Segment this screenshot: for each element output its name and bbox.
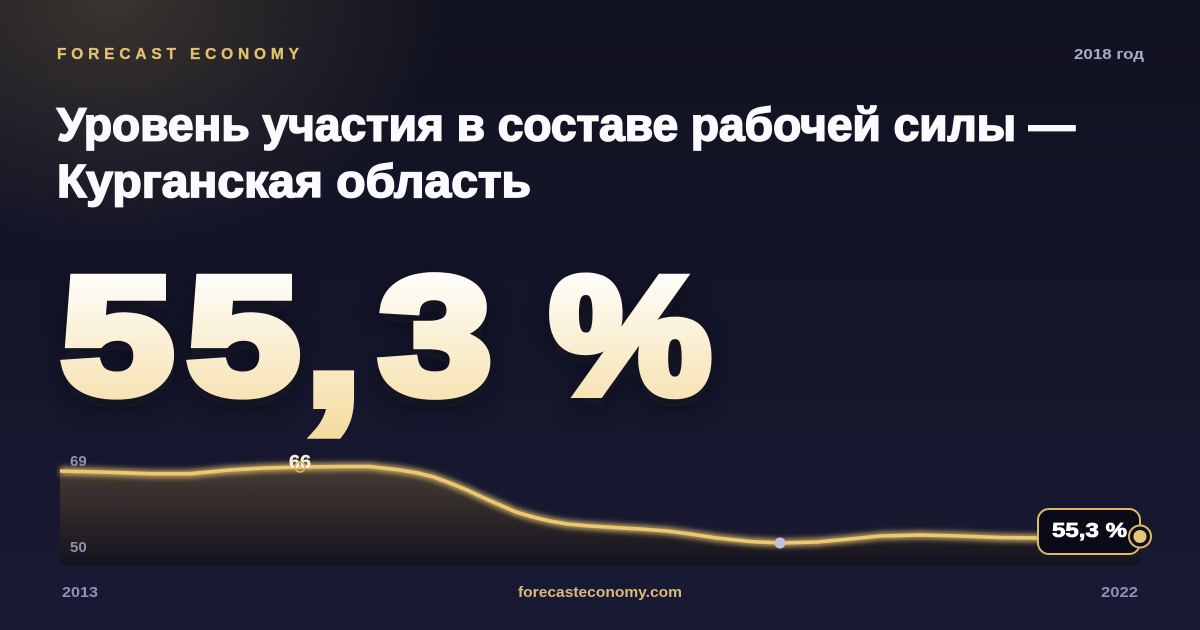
- brand label: FORECAST ECONOMY: [57, 46, 300, 63]
- minimum marker: [774, 538, 786, 548]
- big value: 55,3 %: 3: [379, 243, 492, 429]
- big value shadow: 3: [379, 251, 492, 437]
- chart: line: [60, 466, 1141, 543]
- title: [57, 98, 1075, 207]
- value badge: 55,3 %: [1052, 520, 1127, 542]
- big value shadow: 5: [61, 251, 174, 437]
- start year: 2013: [62, 584, 98, 601]
- big value shadow: %: [550, 251, 711, 436]
- peak label: 66: 66: [289, 452, 311, 472]
- big value: 55,3 %: ,: [304, 230, 363, 445]
- value badge: [1038, 509, 1140, 554]
- axis label: 69: 69: [70, 453, 87, 470]
- big value: 55,3 %: 5: [187, 243, 300, 429]
- axis label: 50: 50: [70, 539, 87, 556]
- year label: 2018 год: [1074, 46, 1145, 63]
- big value shadow: [61, 251, 711, 437]
- chart: line glow: [60, 466, 1141, 543]
- title: Курганская область: [57, 155, 531, 207]
- chart: area under line: [60, 466, 1141, 565]
- title: Уровень участия в составе рабочей силы —: [57, 98, 1075, 150]
- peak marker: [295, 462, 305, 472]
- end year: 2022: [1101, 584, 1138, 601]
- source link: forecasteconomy.com: [518, 584, 682, 601]
- big value: 55,3 %: %: [550, 243, 711, 428]
- big value: 55,3 %: [61, 230, 711, 445]
- end marker: [1129, 526, 1151, 548]
- big value: 55,3 %: 5: [61, 243, 174, 429]
- big value shadow: 5: [187, 251, 300, 437]
